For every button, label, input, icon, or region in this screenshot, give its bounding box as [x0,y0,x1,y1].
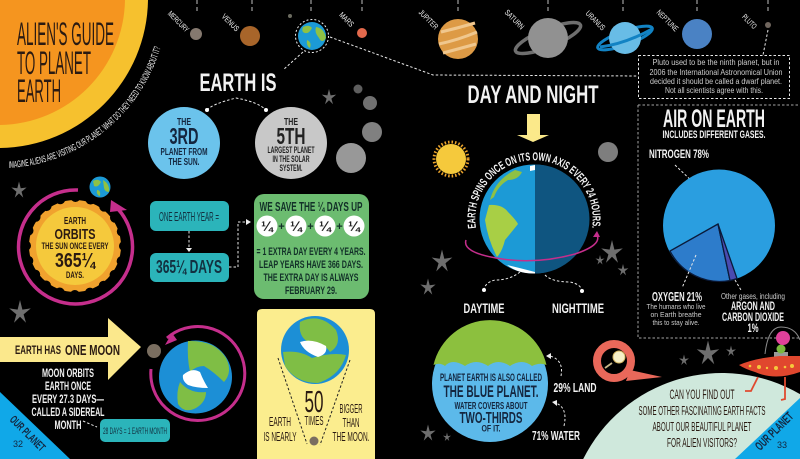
small sun [434,142,468,176]
arrow: down [517,114,549,142]
oxygen label: The humans who live [646,302,706,311]
corner tab: page 33: 33 [777,440,787,450]
circle: 5th largest: SYSTEM. [280,163,302,173]
heading: Day and night: DAY AND NIGHT [468,81,598,109]
large pale planet with question: CAN YOU FIND OUT [670,386,735,402]
circle: 3rd planet: 3RD [170,123,198,149]
land label [546,353,596,395]
oxygen label [646,255,706,327]
planet: Neptune: NEPTUNE [655,8,680,33]
planet: Neptune [655,8,712,49]
small dot near Earth [288,14,292,18]
arrow: Earth has one moon [0,318,141,380]
planet: Venus: VENUS [220,12,241,33]
planet: Saturn [503,8,584,59]
spin arrow [466,231,600,261]
orbit text: THE SUN ONCE EVERY [42,241,109,252]
planet: Jupiter: JUPITER [417,8,440,31]
orbit text: ORBITS [54,226,96,243]
box: 365 days: 365¼ DAYS [156,257,222,277]
card text [264,384,370,444]
pie chart [663,170,775,282]
planet: Pluto [740,12,771,31]
blue planet circle: WATER COVERS ABOUT [454,401,528,412]
land label: 29% LAND [554,380,596,395]
nighttime label [545,275,604,316]
box: quarter days: ¼ [261,218,274,234]
planet: Pluto: PLUTO [740,12,759,31]
magnifying glass callout [597,344,662,381]
large pale planet with question [583,373,800,459]
circle: 3rd planet: PLANET FROM [160,146,208,158]
box: quarter days [254,194,369,299]
card text: BIGGER [340,401,362,416]
moon orbit text: CALLED A SIDEREAL [32,407,104,419]
box: 365 days [150,253,229,282]
box: one Earth year [150,201,229,231]
circle: 5th largest [255,107,327,179]
planet: Earth highlighted [296,20,328,52]
sun with title [0,0,148,148]
blue planet circle: TWO-THIRDS [460,410,523,427]
dashed leader lines [283,30,800,338]
orbit text: EARTH [64,215,86,227]
planet: Jupiter [417,8,478,59]
water label: 71% WATER [532,428,580,443]
earth orbit diagram [19,176,133,304]
planet: Venus [220,12,260,46]
orbit arrowhead [110,200,127,212]
orbit text [42,215,109,281]
orbiting earth icon [90,176,110,198]
box: quarter days: + [278,221,285,233]
planet: Mars: MARS [337,10,356,29]
sun with title: ALIEN'S GUIDE [17,16,114,52]
corner tab: page 33 [735,398,800,459]
blue planet circle: OF IT. [482,424,500,434]
dome [765,327,800,354]
planet: Mars [337,10,367,38]
box: quarter days: + [307,221,314,233]
title: EARTH [17,73,61,109]
circle: 3rd planet [148,107,220,179]
alien [774,331,790,359]
Pluto note box: 2006 the International Astronomical Union [650,68,782,77]
other gases label: ARGON AND [731,301,775,313]
daytime label: DAYTIME [464,300,504,316]
box: quarter days: = 1 EXTRA DAY EVERY 4 YEARS. [256,246,366,258]
planet: Uranus: URANUS [584,9,607,32]
circle: 3rd planet: THE SUN. [168,156,200,168]
stars [9,89,736,441]
box: quarter days: ¼ [290,218,303,234]
corner tab: page 32: 32 [13,439,23,449]
box: quarter days: FEBRUARY 29. [285,285,337,297]
air on Earth panel [646,105,785,335]
moon orbit text: MONTH [54,420,82,432]
box: quarter days: LEAP YEARS HAVE 366 DAYS. [259,259,363,271]
circle: 5th largest: LARGEST PLANET [268,145,315,155]
box: quarter days: ¼ [319,218,332,234]
nighttime label: NIGHTTIME [552,300,604,316]
arrow: Earth has one moon: ONE MOON [65,342,120,359]
curved intro text: IMAGINE ALIENS ARE VISITING OUR PLANET. WHAT DO THEY NEED TO KNOW ABOUT IT? [9,46,160,168]
moon orbit text: EVERY 27.3 DAYS— [32,394,104,406]
Pluto note box [638,56,790,98]
water label [532,400,580,443]
card text: TIMES [304,413,324,428]
corner tab: page 32 [0,392,70,459]
box: quarter days: WE SAVE THE ¼ DAYS UP [260,199,363,214]
box: one Earth year: ONE EARTH YEAR = [159,209,219,224]
nitrogen label [649,149,709,186]
connector for Earth is circles [205,98,268,112]
card text: THAN [342,415,360,430]
box: quarter days: + [336,221,343,233]
circle: 5th largest: THE [284,116,298,128]
moon orbit text: EARTH ONCE [45,381,91,393]
moon [147,344,161,358]
moon orbit text [32,368,104,432]
orbit ring [19,190,133,304]
other gases label: 1% [748,323,758,335]
orbit text: DAYS. [66,270,84,281]
box: quarter days: ¼ [348,218,361,234]
planet: Uranus [584,9,655,54]
Pluto note box: Pluto used to be the ninth planet, but in [652,58,780,67]
other gases label: Other gases, including [721,292,785,301]
card: Earth versus Moon size [257,309,375,459]
oxygen label: on Earth breathe [650,310,702,319]
box: 28 days: 28 DAYS = 1 EARTH MONTH [103,426,167,437]
nitrogen label: NITROGEN 78% [649,149,709,161]
legs [745,377,785,400]
spin text: EARTH SPINS ONCE ON ITS OWN AXIS EVERY 24 HOURS. [467,152,601,228]
box: 28 days [100,419,170,442]
orbit text: 365¼ [55,250,97,272]
grey moons [336,84,382,173]
Pluto note box: Not all scientists agree with this. [665,86,763,95]
alien in UFO [739,327,800,400]
oxygen label: OXYGEN 21% [652,289,702,304]
circle: 5th largest: 5TH [276,123,306,149]
card text: 50 [304,384,324,419]
daytime label [464,272,520,316]
circle: 5th largest: IN THE SOLAR [272,154,310,164]
box: quarter days: THE EXTRA DAY IS ALWAYS [264,272,358,284]
earth with moon orbit [151,327,245,421]
Pluto note box: decided it should be called a dwarf planet. [650,77,782,86]
dashed planet hangers [197,0,768,13]
card text: THE MOON. [332,429,370,444]
other gases label [721,280,785,335]
card text: IS NEARLY [264,429,297,444]
arrow: Earth has one moon: EARTH HAS [15,343,61,357]
blue planet circle: THE BLUE PLANET. [444,382,538,401]
blue planet circle: PLANET EARTH IS ALSO CALLED [440,372,542,384]
spiky sun [29,200,121,292]
card earth [281,316,349,384]
title: TO PLANET [17,45,91,81]
circle: 3rd planet: THE [177,116,191,128]
moon orbit text: MOON ORBITS [42,368,94,380]
planet: Saturn: SATURN [503,8,526,31]
blue planet circle [432,320,548,442]
heading: Earth is: EARTH IS [200,69,276,97]
card text: EARTH [269,414,291,429]
arrows between year boxes [186,219,251,267]
title [17,16,114,109]
saucer [739,356,800,376]
planet: Mercury: MERCURY [166,9,191,34]
day and night globe [480,164,589,274]
grey planet [598,142,618,162]
oxygen label: this to stay alive. [652,318,700,327]
